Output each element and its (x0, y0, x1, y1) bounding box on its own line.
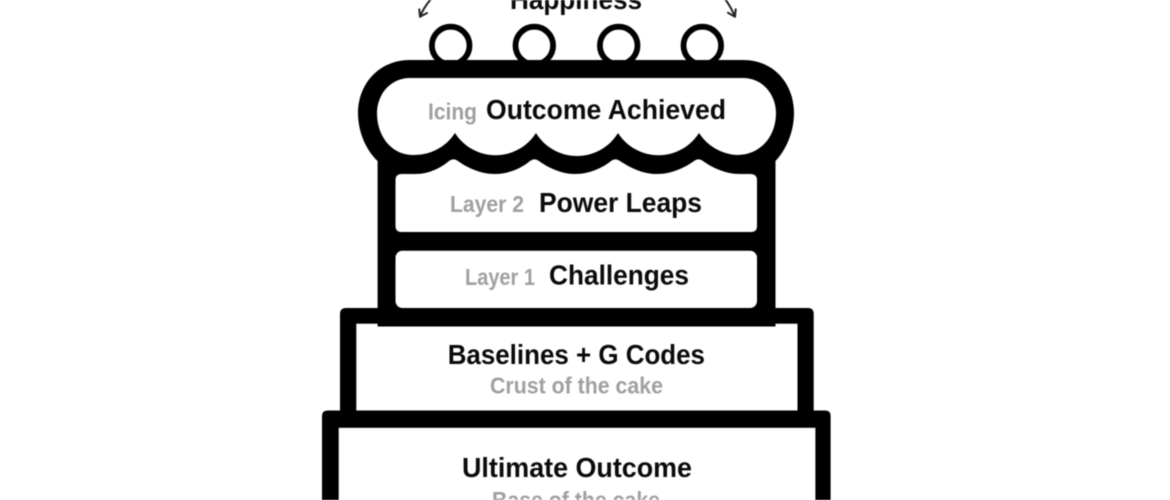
layer 2 panel (396, 159, 757, 232)
layer 1 panel (396, 251, 757, 308)
text: Layer 2: Layer 2 (450, 191, 524, 217)
text: Crust of the cake: Crust of the cake (490, 372, 663, 398)
text: Outcome Achieved: Outcome Achieved (486, 94, 726, 125)
icing (358, 60, 794, 326)
text: Challenges: Challenges (549, 260, 689, 290)
arrow: left (419, 0, 431, 17)
text: Power Leaps: Power Leaps (539, 187, 702, 218)
tier: base of the cake (322, 410, 831, 500)
candles: four circles (432, 27, 721, 64)
text: Layer 1: Layer 1 (465, 264, 535, 290)
arrow: right (725, 0, 736, 17)
text: Ultimate Outcome: Ultimate Outcome (462, 452, 692, 483)
tier: crust of the cake (340, 308, 814, 412)
text: Baselines + G Codes: Baselines + G Codes (448, 339, 705, 370)
text: Icing: Icing (428, 98, 477, 124)
